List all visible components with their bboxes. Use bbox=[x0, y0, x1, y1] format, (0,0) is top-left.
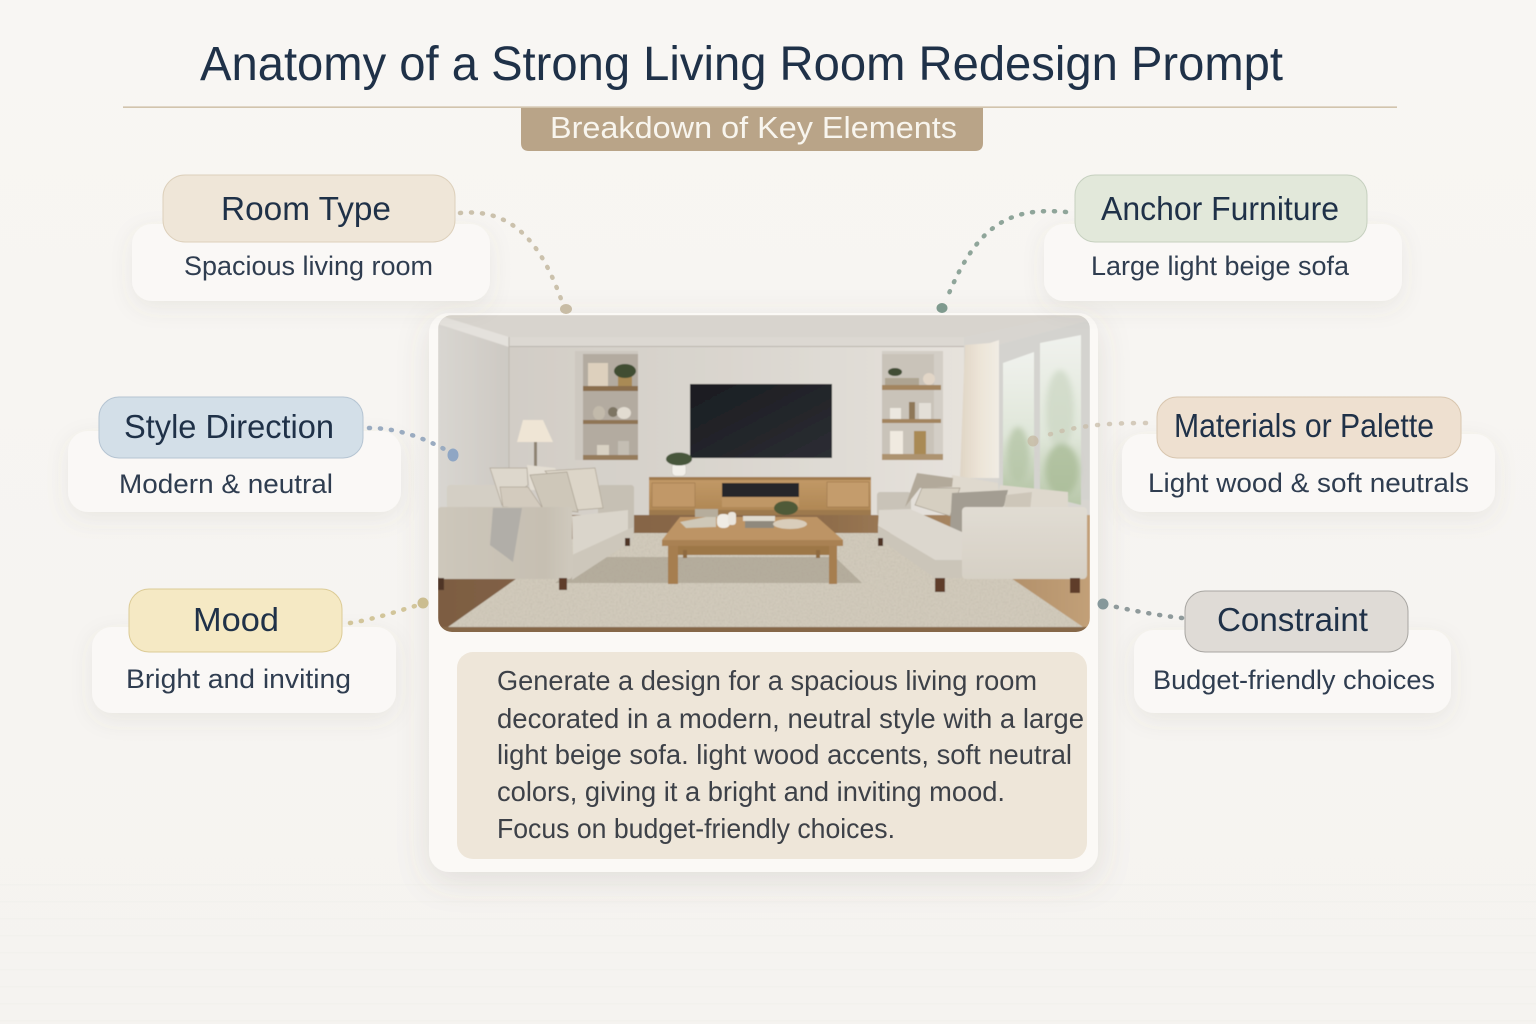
callout: style direction: Style Direction bbox=[124, 408, 334, 445]
rug bbox=[448, 533, 1083, 627]
callout: room type: Room Type bbox=[221, 190, 391, 227]
prompt text: Focus on budget-friendly choices. bbox=[497, 813, 895, 844]
callout: mood bbox=[92, 589, 396, 713]
left niche bbox=[575, 351, 638, 460]
living room photo illustration bbox=[438, 315, 1090, 640]
curtain bbox=[960, 340, 999, 478]
callout: room type bbox=[132, 175, 490, 301]
panel: centre image and prompt card bbox=[429, 313, 1098, 872]
arrow: room type to photo bbox=[460, 212, 572, 314]
console plant bbox=[672, 464, 686, 476]
television bbox=[690, 384, 832, 458]
callout: style direction bbox=[68, 397, 401, 512]
throw blanket bbox=[490, 508, 522, 562]
right niche bbox=[882, 351, 943, 460]
title: Anatomy of a Strong Living Room Redesign Prompt bbox=[200, 38, 1283, 91]
window panes bbox=[1003, 352, 1034, 490]
prompt text: Generate a design for a spacious living room bbox=[497, 665, 1037, 696]
prompt text: decorated in a modern, neutral style with a large bbox=[497, 703, 1084, 734]
prompt text: colors, giving it a bright and inviting mood. bbox=[497, 776, 1005, 807]
callout: constraint bbox=[1134, 591, 1451, 713]
coffee table bbox=[662, 517, 843, 540]
prompt text panel bbox=[457, 652, 1087, 859]
subtitle banner: Breakdown of Key Elements bbox=[550, 110, 957, 145]
callout: anchor furniture: Anchor Furniture bbox=[1101, 190, 1339, 227]
callout: style direction: Modern & neutral bbox=[119, 469, 333, 499]
arrow: materials to photo bbox=[1028, 423, 1146, 446]
arrow: constraint to photo bbox=[1098, 598, 1182, 618]
left wall bbox=[438, 342, 509, 509]
callout: anchor furniture: Large light beige sofa bbox=[1091, 251, 1350, 281]
callout: mood: Bright and inviting bbox=[126, 664, 351, 694]
arrow: style direction to photo bbox=[369, 428, 458, 462]
prompt text: light beige sofa. light wood accents, soft neutral bbox=[497, 739, 1072, 770]
ceiling bbox=[438, 315, 1090, 349]
table objects bbox=[680, 515, 716, 528]
right sofa bbox=[877, 492, 911, 516]
subtitle banner bbox=[521, 108, 983, 151]
media console bbox=[648, 479, 872, 511]
callout: anchor furniture bbox=[1044, 175, 1402, 301]
callout: mood: Mood bbox=[193, 601, 279, 638]
callout: materials or palette bbox=[1122, 397, 1495, 512]
lamp bbox=[534, 442, 537, 468]
callout: constraint: Budget-friendly choices bbox=[1153, 665, 1435, 695]
left sofa bbox=[448, 486, 454, 506]
callout: room type: Spacious living room bbox=[184, 251, 433, 281]
arrow: anchor furniture to photo bbox=[936, 211, 1066, 313]
callout: materials or palette: Light wood & soft neutrals bbox=[1148, 468, 1469, 498]
back wall bbox=[509, 347, 964, 522]
callout: constraint: Constraint bbox=[1217, 601, 1368, 638]
prompt text bbox=[497, 665, 1084, 844]
floor bbox=[438, 515, 1090, 635]
callout: materials or palette: Materials or Palette bbox=[1174, 407, 1434, 444]
right wall bbox=[964, 349, 1090, 516]
arrow: mood to photo bbox=[350, 598, 428, 623]
